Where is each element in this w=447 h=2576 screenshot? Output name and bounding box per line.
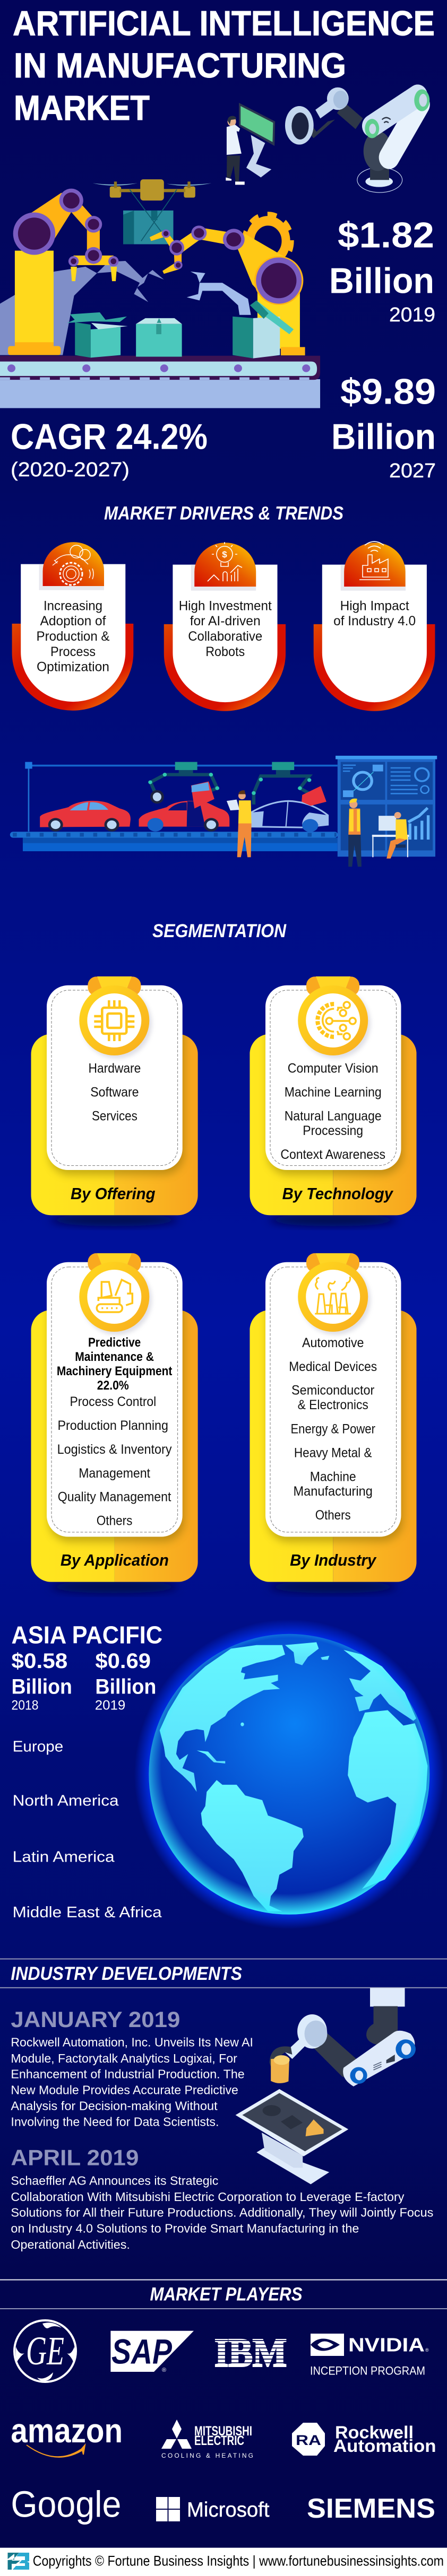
list: 22.0%: [97, 1378, 129, 1393]
panel: by technology: [250, 976, 417, 1226]
news: April 2019: [11, 2145, 433, 2251]
stat: 2027 market size: 2027: [389, 460, 436, 482]
heading: Asia Pacific: ASIA PACIFIC: [12, 1621, 162, 1649]
label: By Offering: [71, 1184, 156, 1203]
region list: Middle East & Africa: [13, 1904, 162, 1921]
stat: 2019 market size: [329, 215, 435, 326]
list: [280, 1061, 385, 1162]
list: [88, 1061, 141, 1123]
logo: Mitsubishi Electric: MITSUBISHI: [194, 2424, 252, 2439]
text: driver 2: High Investment: [179, 598, 272, 613]
date: APRIL 2019: [11, 2145, 139, 2170]
illustration: robotic arms over cars: [148, 762, 314, 805]
logo: Mitsubishi Electric: COOLING & HEATING: [161, 2452, 253, 2459]
list: Quality Management: [58, 1490, 171, 1505]
body text: Operational Activities.: [11, 2238, 130, 2251]
card back: [31, 1034, 198, 1216]
text: driver 3: High Impact: [340, 598, 409, 613]
badge with chip icon: [79, 976, 152, 1059]
body text: New Module Provides Accurate Predictive: [11, 2083, 238, 2097]
logo: NVIDIA: ®: [425, 2347, 429, 2353]
panel: by industry: [250, 1253, 417, 1593]
panel: driver 3: [314, 542, 435, 711]
map: continents: [160, 1642, 428, 1911]
body text: [11, 2174, 433, 2251]
illustration: conveyor belt: [0, 356, 320, 408]
heading: industry developments: INDUSTRY DEVELOPMENTS: [11, 1963, 242, 1984]
list: Software: [90, 1085, 139, 1100]
label: By Technology: [282, 1184, 394, 1203]
illustration: closed box: [136, 318, 182, 357]
body text: Collaboration With Mitsubishi Electric Corporation to Leverage E-factory: [11, 2190, 405, 2204]
list: Process Control: [70, 1394, 156, 1409]
logo: Rockwell Automation: [292, 2423, 436, 2456]
body text: Rockwell Automation, Inc. Unveils Its New AI: [11, 2036, 253, 2049]
illustration: box with lid: [233, 301, 294, 359]
heading: market players: MARKET PLAYERS: [150, 2284, 303, 2304]
text: driver 1: Process: [50, 644, 96, 659]
card front: [265, 1262, 401, 1537]
list: Processing: [303, 1123, 363, 1138]
icon: bulb and growth: $: [222, 549, 227, 560]
list: Heavy Metal &: [294, 1446, 372, 1461]
illustration: drone carrying box: [93, 179, 211, 244]
logo: Rockwell Automation: RA: [296, 2432, 321, 2448]
card front: [265, 985, 401, 1170]
text: driver 1: [36, 598, 110, 675]
stat: 2019: [95, 1649, 156, 1713]
list: Medical Devices: [289, 1359, 377, 1374]
list: Machine Learning: [285, 1085, 382, 1100]
label: By Application: [61, 1551, 169, 1569]
panel: by application: [31, 1253, 198, 1593]
list: Computer Vision: [288, 1061, 379, 1076]
logo: NVIDIA: NVIDIA: [348, 2334, 425, 2356]
stat: CAGR: CAGR 24.2%: [11, 417, 208, 457]
card shape: [12, 542, 133, 711]
illustration: white robot arm: [285, 88, 429, 193]
text: driver 3: [333, 598, 416, 628]
body text: on Industry 4.0 Solutions to Provide Smart Manufacturing in the: [11, 2222, 359, 2236]
panel: driver 1: [12, 542, 133, 711]
title: [13, 4, 435, 127]
footer: [0, 2548, 447, 2576]
card shape: [314, 543, 435, 711]
panel: regional stats: [12, 1621, 162, 1921]
icon: bulb and growth: [208, 542, 242, 581]
list: Hardware: [88, 1061, 141, 1076]
illustration: rail and conveyor: [10, 762, 338, 851]
list: & Electronics: [298, 1398, 368, 1412]
body text: Module, Factorytalk Analytics Logixai, For: [11, 2051, 237, 2065]
stat: 2019 market size: $1.82: [338, 215, 434, 256]
badge with AI gear icon: [298, 976, 371, 1059]
logo: SAP: SAP: [111, 2332, 173, 2371]
body text: [11, 2036, 253, 2129]
body text: Involving the Need for Data Scientists.: [11, 2115, 219, 2129]
illustration: seated operator at desk: [372, 812, 409, 859]
title: IN MANUFACTURING: [14, 46, 346, 85]
news: January 2019: [11, 2007, 253, 2129]
text: driver 1: Production &: [36, 629, 110, 644]
stat: 2019 market size: 2019: [389, 304, 435, 326]
illustration: robot arm over table: [236, 1988, 416, 2184]
illustration: engineer at kiosk: [226, 103, 275, 185]
stat: 2018: [12, 1649, 72, 1713]
illustration: left yellow robot arm: [8, 189, 118, 355]
body text: Enhancement of Industrial Production. The: [11, 2067, 245, 2081]
list: Others: [97, 1514, 132, 1529]
illustration: right yellow robot arm with gear: [150, 215, 305, 355]
list: Context Awareness: [280, 1147, 385, 1162]
text: driver 2: Robots: [205, 644, 245, 659]
body text: Schaeffler AG Announces its Strategic: [11, 2174, 218, 2188]
icon: gear and coins: [53, 545, 93, 585]
illustration: standing supervisor: [348, 799, 362, 867]
illustration: globe: [134, 1619, 444, 1929]
logo: SAP: ®: [162, 2367, 166, 2373]
logo: GE: [14, 2320, 76, 2382]
list: Semiconductor: [291, 1383, 374, 1398]
card back: [250, 1034, 417, 1216]
logo: Rockwell Automation: Automation: [333, 2436, 436, 2456]
logo: Microsoft: [156, 2497, 270, 2521]
heading: segmentation: SEGMENTATION: [152, 921, 287, 941]
body text: Analysis for Decision-making Without: [11, 2099, 218, 2113]
list: Management: [79, 1466, 150, 1481]
illustration: open box: [67, 312, 128, 357]
text: driver 2: [179, 598, 272, 659]
stat: 2019: 2019: [95, 1698, 125, 1713]
logo: Siemens: SIEMENS: [307, 2493, 435, 2524]
panel: by offering: [31, 976, 198, 1226]
stat: CAGR: (2020-2027): [11, 459, 130, 481]
stat: 2019: $0.69: [95, 1649, 151, 1673]
card front: [47, 1262, 183, 1537]
text: driver 1: Increasing: [44, 598, 102, 613]
icon: smart factory: [359, 542, 390, 580]
badge with excavator icon: [79, 1253, 152, 1335]
card back: [250, 1311, 417, 1582]
card shape: [164, 543, 286, 711]
card front: [47, 985, 183, 1170]
logo: Amazon: amazon: [11, 2412, 123, 2450]
text: driver 2: for AI-driven: [190, 614, 261, 628]
logo: NVIDIA: INCEPTION PROGRAM: [310, 2364, 425, 2378]
badge with factory icon: [298, 1253, 371, 1335]
logo: NVIDIA: [310, 2334, 429, 2378]
logo: Google: Google: [11, 2483, 121, 2525]
title: MARKET: [14, 88, 150, 127]
logo: Rockwell Automation: Rockwell: [335, 2423, 414, 2442]
text: driver 1: Optimization: [37, 660, 109, 675]
stat: 2019: Billion: [95, 1675, 156, 1698]
logo: GE: GE: [26, 2329, 64, 2373]
list: Maintenance &: [75, 1350, 154, 1364]
illustration: worker with tablet: [227, 790, 252, 857]
illustration: shadow arms: [0, 261, 251, 355]
body text: Solutions for All their Future Productions. Additionally, They will Jointly Focus: [11, 2206, 433, 2220]
stat: 2027 market size: $9.89: [340, 372, 436, 412]
stat: 2019 market size: Billion: [329, 261, 434, 301]
stat: 2018: 2018: [12, 1698, 38, 1713]
panel: control wall: [336, 756, 437, 857]
region list: Latin America: [13, 1849, 115, 1866]
hero illustration: robots and conveyor: [0, 88, 429, 408]
logo: IBM: IBM: [214, 2330, 287, 2375]
illustration: automotive assembly line: [10, 756, 437, 867]
list: Energy & Power: [290, 1422, 375, 1437]
stat: 2018: Billion: [12, 1675, 72, 1698]
logo: Microsoft: Microsoft: [187, 2499, 270, 2521]
illustration: red car: [40, 801, 131, 832]
region list: Europe: [13, 1739, 63, 1756]
list: Predictive: [88, 1335, 141, 1350]
list: Natural Language: [285, 1108, 382, 1123]
logo: Fortune Business Insights: [7, 2553, 29, 2570]
region list: [13, 1739, 162, 1921]
stat: 2027 market size: Billion: [331, 417, 436, 457]
region list: North America: [13, 1792, 119, 1809]
text: driver 1: Adoption of: [40, 614, 106, 628]
illustration: car being assembled: [139, 781, 229, 832]
logo: Mitsubishi Electric: ELECTRIC: [194, 2433, 244, 2448]
list: Others: [315, 1508, 351, 1523]
date: JANUARY 2019: [11, 2007, 180, 2032]
label: By Industry: [290, 1551, 377, 1569]
heading: market drivers: MARKET DRIVERS & TRENDS: [104, 503, 343, 524]
illustration: car shell: [251, 786, 328, 832]
list: Manufacturing: [294, 1484, 373, 1499]
list: Automotive: [302, 1335, 364, 1350]
list: Machinery Equipment: [57, 1364, 172, 1378]
stat: CAGR: [11, 417, 208, 481]
logo: Mitsubishi Electric: [161, 2420, 253, 2459]
card back: [31, 1311, 198, 1582]
list: Production Planning: [57, 1418, 168, 1433]
stat: 2027 market size: [331, 372, 436, 482]
text: driver 3: of Industry 4.0: [333, 614, 416, 628]
list: [57, 1335, 172, 1529]
list: [289, 1335, 377, 1523]
text: driver 2: Collaborative: [188, 629, 262, 644]
list: Services: [92, 1108, 137, 1123]
stat: 2018: $0.58: [12, 1649, 67, 1673]
list: Machine: [310, 1469, 356, 1484]
panel: driver 2: [164, 542, 286, 711]
list: Logistics & Inventory: [57, 1442, 172, 1457]
